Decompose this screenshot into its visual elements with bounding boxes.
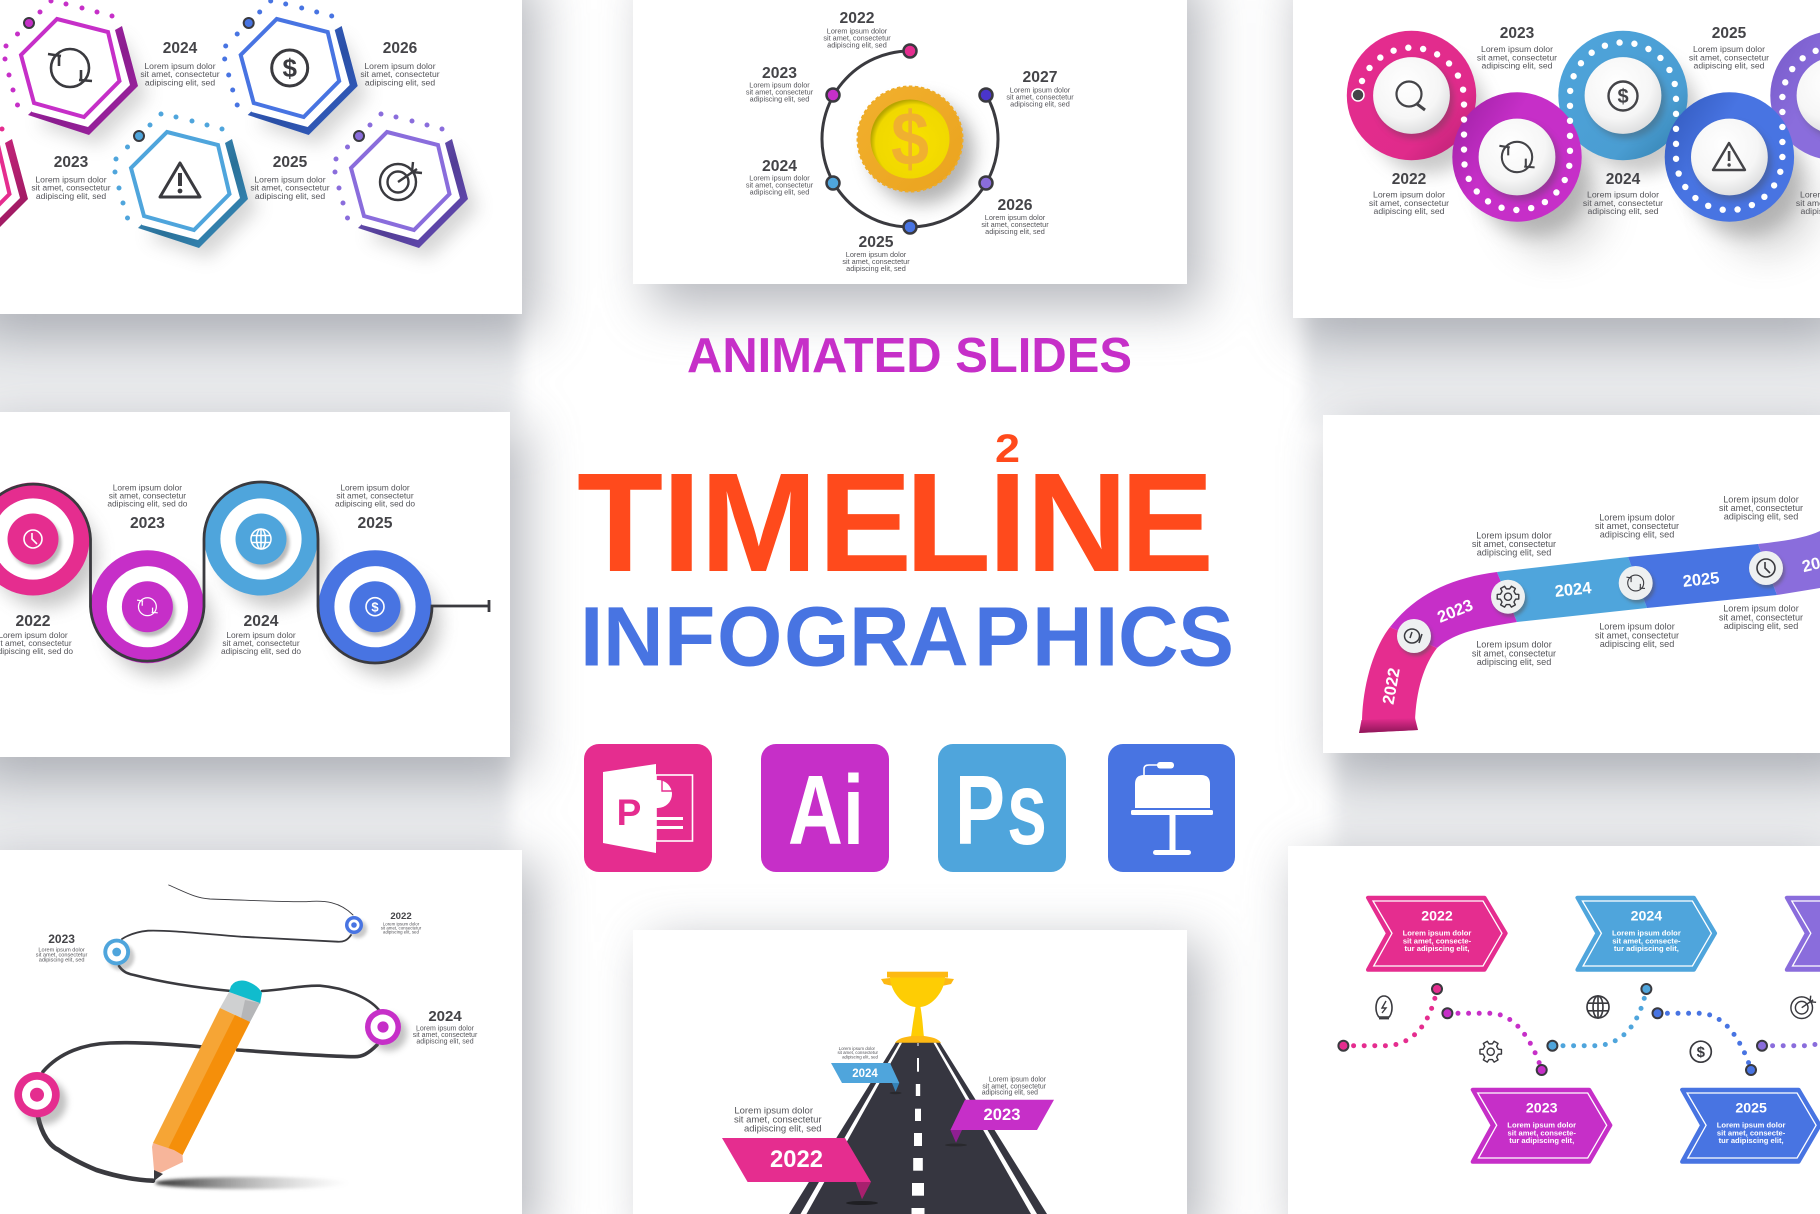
arrow box: 2025: Lorem ipsum dolor <box>1717 1121 1785 1130</box>
subtitle: ANIMATED SLIDES <box>687 329 1132 383</box>
labels: hexagon timeline: 2026 <box>383 40 418 57</box>
icon: Photoshop: P <box>955 755 1005 865</box>
labels: snake timeline: 2025 <box>358 515 393 532</box>
labels: coin orbit: Lorem ipsum dolor <box>1010 86 1070 94</box>
labels: snake timeline: sit amet, consectetur <box>222 638 300 648</box>
labels: coin orbit: adipiscing elit, sed <box>846 264 906 273</box>
circle shadows <box>1370 57 1803 236</box>
icon: dollar: $ <box>1697 1044 1706 1061</box>
icon: Keynote <box>1108 744 1235 872</box>
arrow box: 2025: sit amet, consecte- <box>1717 1128 1786 1137</box>
labels: ribbon timeline: adipiscing elit, sed <box>1600 530 1674 540</box>
labels: snake timeline: Lorem ipsum dolor <box>0 630 68 640</box>
labels: snake timeline: adipiscing elit, sed do <box>221 646 301 656</box>
orbit arc <box>822 51 998 227</box>
labels: snake timeline: 2024 <box>244 613 279 630</box>
icon: dollar: $ <box>1617 86 1629 108</box>
labels: pencil path: adipiscing elit, sed <box>39 958 84 964</box>
labels: road: Lorem ipsum dolor <box>989 1077 1047 1084</box>
labels: pencil path: Lorem ipsum dolor <box>416 1025 474 1032</box>
labels: pencil path: sit amet, consectetur <box>36 953 88 959</box>
panel: top-left hexagon timeline <box>0 0 522 314</box>
labels: coin orbit: adipiscing elit, sed <box>827 40 887 50</box>
labels: pencil path: Lorem ipsum dolor <box>38 948 85 954</box>
labels: linked circles: 2022 <box>1392 171 1426 188</box>
arrow box: 2024 <box>1577 898 1715 970</box>
labels: coin orbit <box>746 10 1074 273</box>
arrow box: 2025 <box>1682 1090 1820 1162</box>
arrow box: 2022 <box>1368 898 1506 970</box>
labels: ribbon timeline: adipiscing elit, sed <box>1477 548 1551 558</box>
labels: ribbon timeline: adipiscing elit, sed <box>1724 512 1798 522</box>
labels: snake timeline: sit amet, consectetur <box>336 491 414 501</box>
labels: linked circles: 2025 <box>1712 25 1747 42</box>
labels: hexagon timeline: Lorem ipsum dolor <box>144 61 216 71</box>
panel: top-right linked circles <box>1293 0 1820 318</box>
arrow box: 2022: sit amet, consecte- <box>1403 936 1472 945</box>
labels: ribbon timeline: Lorem ipsum dolor <box>1476 640 1552 650</box>
path markers <box>14 916 407 1125</box>
arrow box: 2022: 2022 <box>1421 909 1453 925</box>
labels: road: sit amet, consectetur <box>734 1114 822 1125</box>
arrow box: 2023: Lorem ipsum dolor <box>1507 1121 1576 1130</box>
flag: 2022 <box>722 1138 878 1205</box>
labels: coin orbit: adipiscing elit, sed <box>750 188 809 196</box>
flag: 2023: 2023 <box>984 1105 1020 1124</box>
labels: pencil path: adipiscing elit, sed <box>416 1039 474 1046</box>
panel: mid-left snake timeline <box>0 412 510 757</box>
labels: hexagon timeline: sit amet, consectetur <box>360 69 440 79</box>
labels: coin orbit: Lorem ipsum dolor <box>749 80 810 90</box>
icon: magnifier <box>1396 82 1425 110</box>
gray bands between panels <box>0 303 1820 860</box>
panel: bottom-center road <box>633 930 1187 1214</box>
labels: pencil path: Lorem ipsum dolor <box>383 921 419 926</box>
labels: hexagon timeline: Lorem ipsum dolor <box>35 174 107 184</box>
labels: coin orbit: adipiscing elit, sed <box>985 227 1045 236</box>
hexagon: pink partial <box>0 125 28 248</box>
icon: clock <box>24 530 42 548</box>
arrow box: 2024: 2024 <box>1631 909 1662 925</box>
arrow box: 2022: tur adipiscing elit, <box>1405 944 1469 953</box>
labels: pencil path: adipiscing elit, sed <box>383 930 419 935</box>
labels: ribbon timeline: sit amet, consectetur <box>1719 612 1803 622</box>
ring centers <box>0 498 416 647</box>
spheres <box>1373 57 1820 200</box>
labels: coin orbit: sit amet, consectetur <box>981 220 1049 229</box>
labels: hexagon timeline: adipiscing elit, sed <box>145 77 215 87</box>
labels: coin orbit: Lorem ipsum dolor <box>827 26 887 36</box>
hexagon: 2024 <box>5 1 148 145</box>
labels: linked circles: Lorem ipsum dolor <box>1373 190 1445 200</box>
labels: linked circles: Lorem ipsum dolor <box>1587 190 1659 200</box>
labels: snake timeline: 2022 <box>16 613 51 630</box>
arrow box: 2026 partial <box>1787 898 1820 970</box>
icon: Illustrator <box>761 744 889 872</box>
labels: road: adipiscing elit, sed <box>982 1090 1038 1097</box>
icon: warning <box>1713 143 1745 170</box>
icon: clock <box>1757 559 1775 577</box>
labels: ribbon timeline: sit amet, consectetur <box>1472 648 1556 658</box>
pencil shadow <box>155 1177 349 1189</box>
labels: coin orbit: adipiscing elit, sed <box>750 94 809 104</box>
ribbon years <box>1380 550 1820 706</box>
icon: bulb <box>1376 996 1392 1018</box>
labels: linked circles: sit amet, consectetur <box>1689 52 1769 62</box>
panel: top-center coin orbit <box>633 0 1187 284</box>
icon: Illustrator: Ai <box>788 755 864 865</box>
labels: road: adipiscing elit, sed <box>842 1054 879 1059</box>
arrow box: 2024: sit amet, consecte- <box>1612 936 1681 945</box>
arrow box: 2025: 2025 <box>1735 1101 1767 1117</box>
labels: ribbon timeline <box>1472 494 1803 667</box>
arrow box: 2023 <box>1473 1090 1610 1162</box>
labels: road: sit amet, consectetur <box>837 1050 879 1055</box>
arrow box: 2023: sit amet, consecte- <box>1508 1128 1576 1137</box>
ribbon nodes <box>1397 551 1785 656</box>
icon: gauge <box>1404 629 1422 643</box>
labels: pencil path: 2022 <box>390 911 412 922</box>
icon: dollar: $ <box>371 600 379 614</box>
labels: road: sit amet, consectetur <box>982 1083 1047 1090</box>
labels: coin orbit: 2023 <box>762 65 797 82</box>
labels: coin orbit: sit amet, consectetur <box>746 88 814 96</box>
labels: coin orbit: sit amet, consectetur <box>842 257 910 266</box>
labels: coin orbit: Lorem ipsum dolor <box>846 250 906 259</box>
labels: hexagon timeline <box>31 40 440 201</box>
labels: ribbon timeline: adipiscing elit, sed <box>1477 657 1551 667</box>
labels: linked circles: sit amet, consectetur <box>1369 198 1449 208</box>
icon: dollar <box>1690 1041 1711 1062</box>
coin <box>858 86 974 204</box>
path markers <box>1338 984 1767 1075</box>
labels: ribbon timeline: Lorem ipsum dolor <box>1599 622 1675 632</box>
title: timeline: TIMELINE <box>577 443 1214 601</box>
ribbon years: 2024 <box>1554 579 1593 601</box>
coin: $ <box>891 97 929 182</box>
labels: pencil path: sit amet, consectetur <box>413 1032 478 1039</box>
icon: PowerPoint <box>584 744 712 872</box>
icon: refresh <box>137 598 158 616</box>
ribbon <box>1359 531 1820 733</box>
rings <box>0 482 432 663</box>
labels: snake timeline: adipiscing elit, sed do <box>107 499 188 509</box>
hexagon: 2026: $ <box>282 53 297 83</box>
labels: ribbon timeline: Lorem ipsum dolor <box>1723 604 1799 614</box>
ribbon years: 2025 <box>1682 569 1720 591</box>
ring shadows <box>0 503 440 676</box>
labels: ribbon timeline: sit amet, consectetur <box>1719 503 1803 513</box>
labels: ribbon timeline: sit amet, consectetur <box>1472 539 1556 549</box>
labels: ribbon timeline: adipiscing elit, sed <box>1724 621 1798 631</box>
labels: ribbon timeline: sit amet, consectetur <box>1595 521 1679 531</box>
labels: coin orbit: 2025 <box>859 234 894 251</box>
labels: coin orbit: sit amet, consectetur <box>1006 92 1074 102</box>
labels: road <box>734 1046 1047 1135</box>
ribbon years: 2023 <box>1435 596 1476 627</box>
arrow box: 2024: Lorem ipsum dolor <box>1612 929 1681 938</box>
labels: hexagon timeline: sit amet, consectetur <box>140 69 220 79</box>
labels: road: adipiscing elit, sed <box>744 1124 822 1135</box>
labels: ribbon timeline: Lorem ipsum dolor <box>1599 512 1675 522</box>
labels: linked circles: adipiscing elit, sed <box>1588 206 1659 216</box>
labels: ribbon timeline: Lorem ipsum dolor <box>1723 494 1799 504</box>
panel: bottom-right arrows and dotted path <box>1288 846 1820 1214</box>
labels: snake timeline: 2023 <box>130 515 165 532</box>
title: superscript 2: 2 <box>995 427 1020 471</box>
panel: bottom-left pencil path <box>0 850 522 1214</box>
icon: gear <box>1497 586 1519 607</box>
long soft shadows <box>1505 155 1817 255</box>
labels: hexagon timeline: 2025 <box>273 154 308 171</box>
labels: pencil path: 2024 <box>428 1008 462 1025</box>
labels: coin orbit: 2027 <box>1023 69 1058 86</box>
labels: linked circles: Lorem ipsum dolor <box>1693 44 1765 54</box>
labels: coin orbit: 2024 <box>762 158 797 175</box>
arrow box: 2025: tur adipiscing elit, <box>1719 1136 1784 1145</box>
title: infographics: INFOGRAPHICS <box>580 590 1234 684</box>
panel: mid-right ribbon timeline <box>1323 415 1820 753</box>
connector line <box>0 482 489 663</box>
flag: 2022: 2022 <box>770 1146 823 1173</box>
icon: globe <box>1587 996 1609 1018</box>
labels: ribbon timeline: adipiscing elit, sed <box>1600 639 1674 649</box>
icon: Photoshop <box>938 744 1066 872</box>
labels: snake timeline: sit amet, consectetur <box>109 491 186 501</box>
labels: snake timeline: adipiscing elit, sed do <box>335 499 415 509</box>
flag: 2023 <box>945 1100 1054 1146</box>
ribbon years: 2022 <box>1380 667 1404 706</box>
icon: dollar <box>1608 82 1638 110</box>
labels: coin orbit: sit amet, consectetur <box>823 34 891 42</box>
arrow box: 2023: 2023 <box>1526 1101 1558 1117</box>
labels: snake timeline: Lorem ipsum dolor <box>226 630 296 640</box>
labels: linked circles: adipiscing elit, sed <box>1482 61 1553 71</box>
labels: hexagon timeline: 2023 <box>54 154 89 171</box>
labels: hexagon timeline: Lorem ipsum dolor <box>254 174 326 184</box>
labels: linked circles <box>1369 25 1820 216</box>
labels: coin orbit: Lorem ipsum dolor <box>985 213 1045 222</box>
dotted path <box>1358 42 1820 210</box>
labels: pencil path: sit amet, consectetur <box>381 926 422 930</box>
labels: hexagon timeline: adipiscing elit, sed <box>365 77 435 87</box>
icon: dollar <box>366 598 384 616</box>
icon: gear <box>1480 1041 1501 1062</box>
icon: refresh <box>1626 575 1645 591</box>
labels: linked circles: adipiscing elit, sed <box>1374 206 1445 216</box>
hexagon: 2025 <box>335 114 478 258</box>
pencil line <box>38 885 379 1181</box>
icon: PowerPoint: P <box>617 792 641 833</box>
labels: hexagon timeline: adipiscing elit, sed <box>255 191 325 201</box>
labels: coin orbit: 2022 <box>840 10 875 27</box>
labels: pencil path <box>36 911 478 1046</box>
labels: linked circles: 2024 <box>1606 171 1641 188</box>
icon: refresh <box>1499 142 1535 172</box>
hexagon: 2023 <box>115 114 258 258</box>
icon: trophy <box>881 972 954 1043</box>
labels: snake timeline: Lorem ipsum dolor <box>113 483 182 493</box>
labels: linked circles: adipiscing elit, sed <box>1694 61 1765 71</box>
arrow box: 2023: tur adipiscing elit, <box>1509 1136 1574 1145</box>
labels: hexagon timeline: sit amet, consectetur <box>31 183 111 193</box>
icon: target <box>1791 996 1816 1018</box>
labels: coin orbit: Lorem ipsum dolor <box>749 174 810 182</box>
labels: hexagon timeline: 2024 <box>163 40 198 57</box>
flag: 2024 <box>831 1063 902 1094</box>
hexagon: 2026 <box>225 1 368 145</box>
rings front row <box>1452 92 1794 222</box>
orbit markers <box>826 44 992 234</box>
start marker <box>1352 89 1364 101</box>
labels: coin orbit: 2026 <box>998 197 1033 214</box>
labels: coin orbit: adipiscing elit, sed <box>1010 100 1070 108</box>
labels: snake timeline <box>0 483 415 656</box>
labels: linked circles: 2023 <box>1500 25 1535 42</box>
labels: linked circles: sit amet, consectetur <box>1583 198 1663 208</box>
labels: pencil path: 2023 <box>48 932 75 946</box>
labels: hexagon timeline: Lorem ipsum dolor <box>364 61 436 71</box>
labels: coin orbit: sit amet, consectetur <box>746 180 814 190</box>
icon: pencil <box>152 981 262 1181</box>
labels: road: Lorem ipsum dolor <box>839 1046 876 1051</box>
labels: hexagon timeline: adipiscing elit, sed <box>36 191 106 201</box>
road <box>789 1043 1047 1214</box>
dotted paths <box>1343 989 1820 1070</box>
labels: linked circles: Lorem ipsum dolor <box>1481 44 1553 54</box>
labels: ribbon timeline: sit amet, consectetur <box>1595 630 1679 640</box>
labels: ribbon timeline: Lorem ipsum dolor <box>1476 530 1552 540</box>
arrow box: 2024: tur adipiscing elit, <box>1614 944 1679 953</box>
flag: 2024: 2024 <box>852 1068 878 1080</box>
rings back row <box>1347 31 1820 160</box>
labels: linked circles: sit amet, consectetur <box>1477 52 1557 62</box>
labels: road: Lorem ipsum dolor <box>734 1105 813 1116</box>
icon: globe <box>251 529 271 549</box>
icon: Photoshop: s <box>1007 751 1047 867</box>
labels: snake timeline: Lorem ipsum dolor <box>340 483 410 493</box>
labels: hexagon timeline: sit amet, consectetur <box>250 183 330 193</box>
arrow box: 2022: Lorem ipsum dolor <box>1403 929 1471 938</box>
